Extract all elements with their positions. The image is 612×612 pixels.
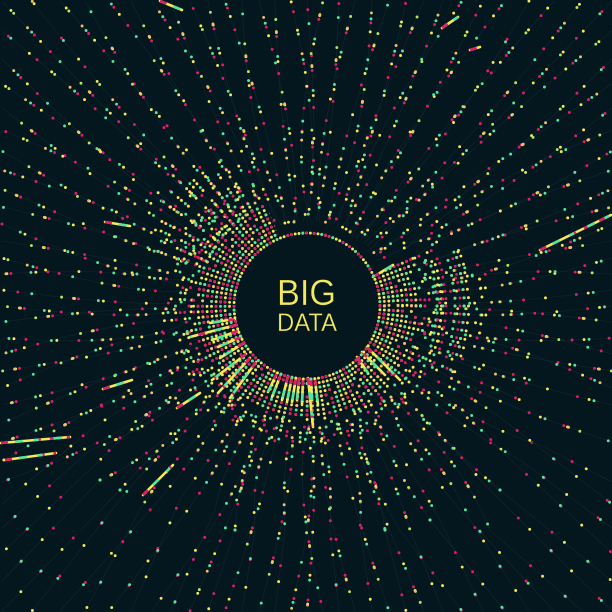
title line: DATA: DATA [277,309,337,337]
dense dot ring around the circle [171,170,443,442]
sparse dots in the lower corners [2,425,612,611]
extended dot fans, upper left and right [155,170,482,377]
inner edge row of dots [234,233,380,379]
title line: BIG: BIG [277,272,336,313]
title: BIG DATA [277,272,337,337]
